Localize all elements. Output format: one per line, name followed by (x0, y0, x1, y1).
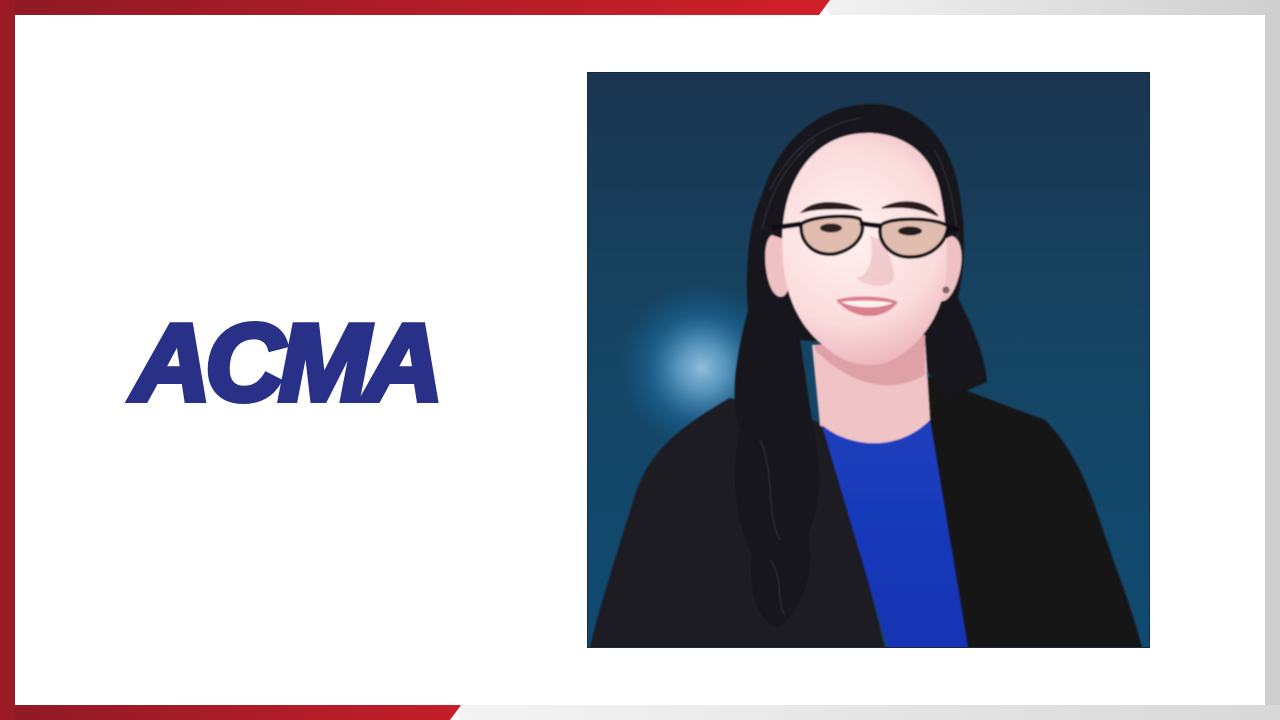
blue top (822, 420, 968, 648)
blazer (587, 398, 885, 660)
portrait photo (587, 72, 1150, 660)
photo edge (588, 72, 1150, 648)
hair strands (760, 118, 958, 615)
mouth (836, 296, 898, 316)
eyebrows (802, 202, 938, 216)
hair (735, 104, 987, 628)
neck shadow (815, 335, 925, 385)
logo: ACMA: ACMA (129, 302, 443, 424)
face (782, 133, 947, 365)
photo background (587, 72, 1150, 648)
neck (812, 340, 930, 450)
blazer right (925, 375, 1145, 660)
eyes (820, 224, 922, 236)
glasses (772, 216, 958, 257)
ears (765, 235, 962, 301)
earring (942, 286, 950, 294)
nose shading (856, 236, 894, 286)
